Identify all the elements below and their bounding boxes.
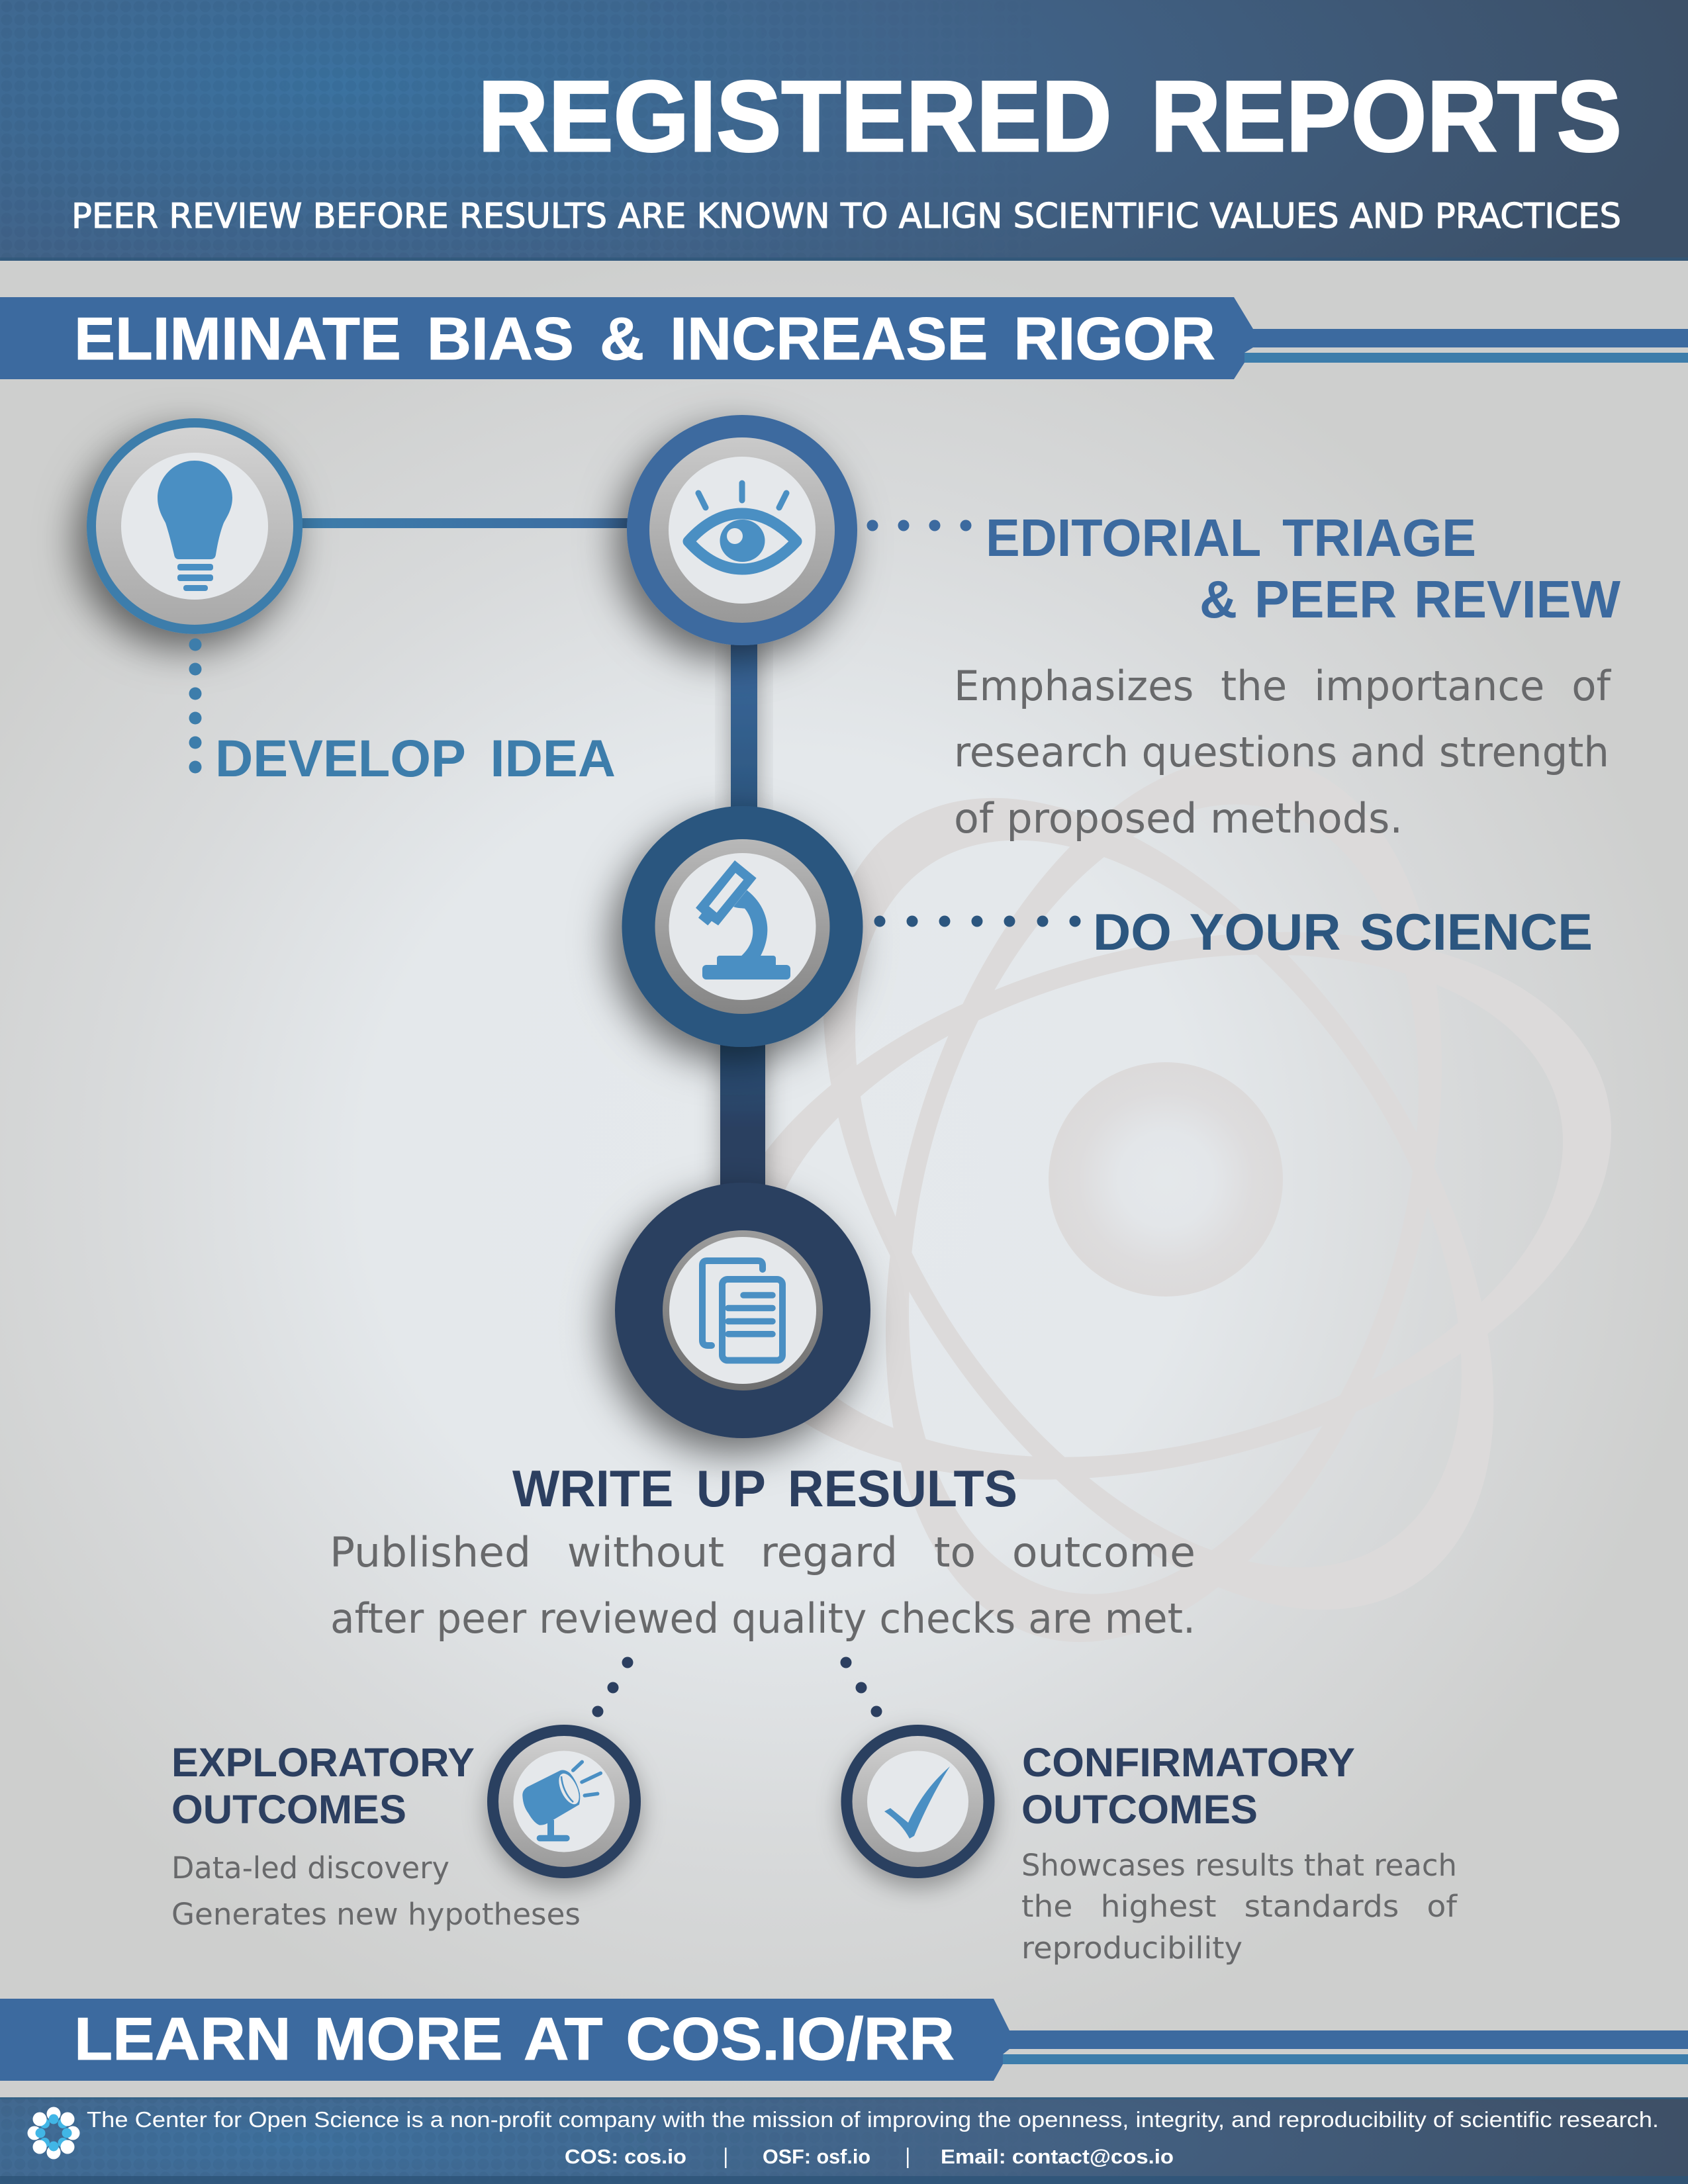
- text block: published: [330, 1528, 1196, 1643]
- atom orbit, near vertical: [790, 691, 1537, 1707]
- banner heading: LEARN MORE AT COS.IO/RR: [74, 2006, 955, 2073]
- icon: microscope: [696, 860, 790, 979]
- footer band: [0, 2097, 1688, 2184]
- atom nucleus: [1049, 1062, 1283, 1297]
- section banner: eliminate bias: [0, 297, 1688, 379]
- heading: exploratory: OUTCOMES: [171, 1787, 406, 1832]
- node: do your science: [638, 823, 846, 1030]
- section banner: learn more: [0, 1999, 1688, 2081]
- label: develop idea: DEVELOP IDEA: [215, 729, 616, 788]
- text block: exploratory: [171, 1850, 581, 1932]
- dotted connector: idea label: [189, 638, 201, 773]
- mission statement: The Center for Open Science is a non-profit company with the mission of improving the openness, integrity, and reproducibility of scientific research.: [87, 2107, 1659, 2132]
- text block: emphasizes: research questions and strength: [954, 728, 1609, 776]
- node: write up results: [615, 1183, 870, 1438]
- text block: confirmatory: Showcases results that reach: [1021, 1848, 1457, 1883]
- text block: published: after peer reviewed quality checks are met.: [330, 1594, 1196, 1643]
- text block: exploratory: Generates new hypotheses: [171, 1897, 581, 1932]
- node: confirmatory outcomes: [847, 1730, 989, 1873]
- node: exploratory outcomes: [492, 1730, 635, 1873]
- heading: write up results: WRITE UP RESULTS: [512, 1459, 1017, 1518]
- dotted connector: editorial: [867, 520, 972, 531]
- text block: confirmatory: [1021, 1848, 1458, 1966]
- connector: review to science: [731, 629, 757, 807]
- node: editorial triage: [638, 426, 846, 634]
- title: REGISTERED REPORTS: [478, 60, 1622, 173]
- header band: [0, 0, 1688, 261]
- heading: exploratory: [171, 1740, 475, 1832]
- dotted connector: confirmatory: [841, 1657, 882, 1717]
- atom orbit, falling to the right: [686, 680, 1630, 1728]
- label: peer review: & PEER REVIEW: [1199, 570, 1620, 629]
- atom watermark: [658, 680, 1669, 1728]
- heading: exploratory: EXPLORATORY: [171, 1740, 475, 1785]
- contact line: Email: contact@cos.io: [941, 2145, 1174, 2168]
- text block: published: Published without regard to outcome: [330, 1528, 1196, 1576]
- connector: science to write-up: [720, 1032, 765, 1198]
- icon: spotlight: [522, 1762, 600, 1841]
- text block: emphasizes: Emphasizes the importance of: [954, 662, 1612, 710]
- node: develop idea: [91, 423, 298, 629]
- dotted connector: exploratory: [592, 1657, 633, 1717]
- text block: emphasizes: of proposed methods.: [954, 794, 1403, 842]
- atom orbit, near horizontal: [658, 845, 1669, 1567]
- contact line: OSF: osf.io: [763, 2145, 870, 2168]
- icon: documents: [702, 1261, 782, 1361]
- icon: check mark: [884, 1766, 950, 1839]
- dotted connector: science: [874, 916, 1080, 927]
- connector: idea to review: [291, 518, 662, 528]
- heading: confirmatory: OUTCOMES: [1021, 1787, 1258, 1832]
- heading: confirmatory: [1021, 1740, 1355, 1832]
- subtitle: PEER REVIEW BEFORE RESULTS ARE KNOWN TO ALIGN SCIENTIFIC VALUES AND PRACTICES: [71, 197, 1621, 236]
- contact line: COS: cos.io: [565, 2145, 686, 2168]
- text block: exploratory: Data-led discovery: [171, 1850, 449, 1886]
- banner heading: ELIMINATE BIAS & INCREASE RIGOR: [74, 306, 1215, 373]
- logo: [28, 2107, 79, 2159]
- heading: confirmatory: CONFIRMATORY: [1022, 1740, 1355, 1785]
- icon: eye: [688, 483, 796, 569]
- label: editorial triage: EDITORIAL TRIAGE: [986, 508, 1476, 567]
- text block: emphasizes: [954, 662, 1612, 842]
- label: do your science: DO YOUR SCIENCE: [1093, 903, 1593, 961]
- icon: light bulb: [158, 461, 232, 591]
- text block: confirmatory: the highest standards of: [1021, 1889, 1458, 1924]
- contact line: [565, 2145, 1174, 2168]
- text block: confirmatory: reproducibility: [1021, 1931, 1243, 1966]
